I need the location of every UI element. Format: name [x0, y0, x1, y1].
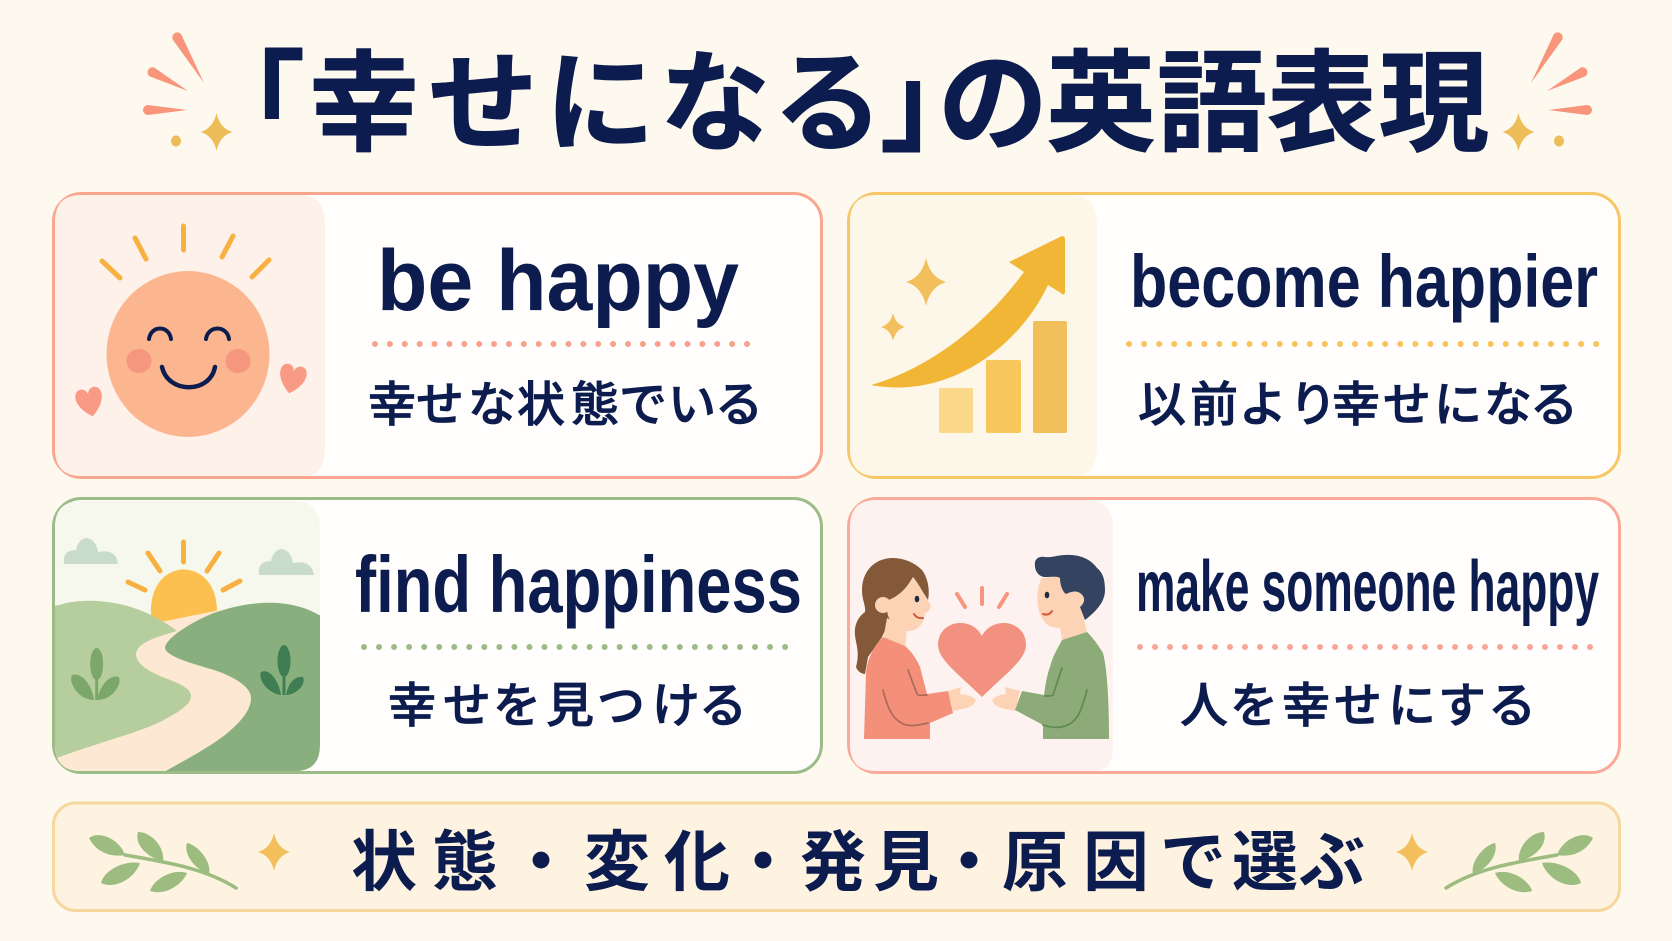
- icon: right sparkle: [1396, 833, 1428, 871]
- dotted divider: [1140, 644, 1592, 650]
- english phrase: find happiness: [355, 540, 802, 629]
- card frame: [54, 498, 822, 772]
- title: 「幸せになる」の英語表現: [195, 43, 1489, 166]
- dotted divider: [1129, 341, 1600, 347]
- panel: summary banner: [54, 803, 1620, 910]
- illustration: man: [992, 555, 1109, 739]
- icon: plants: [71, 645, 304, 700]
- icon: sun rays: [128, 542, 240, 590]
- card frame: [848, 498, 1620, 772]
- panel: find happiness: [54, 498, 822, 772]
- icon: clouds: [64, 538, 314, 575]
- english phrase: be happy: [377, 233, 739, 329]
- icon: smiling sun: [74, 226, 308, 437]
- icon: left sparkle: [258, 833, 290, 871]
- illustration background: [850, 195, 1097, 476]
- icon: left sprig: [89, 832, 236, 892]
- japanese meaning: 幸せを見つける: [388, 680, 747, 733]
- panel: make someone happy: [848, 498, 1620, 772]
- icon: rising arrow and bars: [871, 236, 1067, 433]
- icon: heart with rays: [938, 588, 1026, 697]
- panel: be happy: [54, 194, 822, 478]
- illustration background: [850, 500, 1113, 771]
- japanese meaning: 以前より幸せになる: [1138, 379, 1578, 432]
- title decoration: right burst: [1502, 32, 1592, 151]
- icon: right sprig: [1446, 832, 1593, 892]
- illustration: path through hills: [54, 499, 320, 772]
- illustration background: [55, 195, 325, 476]
- title decoration: left burst: [143, 32, 232, 151]
- card frame: [54, 194, 822, 478]
- banner frame: [54, 803, 1620, 910]
- summary text: 状態・変化・発見・原因で選ぶ: [351, 825, 1365, 899]
- japanese meaning: 人を幸せにする: [1180, 680, 1536, 733]
- dotted divider: [364, 644, 788, 650]
- dotted divider: [375, 341, 748, 347]
- japanese meaning: 幸せな状態でいる: [368, 379, 763, 432]
- card frame: [848, 194, 1620, 478]
- panel: become happier: [848, 194, 1620, 478]
- illustration: woman: [855, 558, 976, 739]
